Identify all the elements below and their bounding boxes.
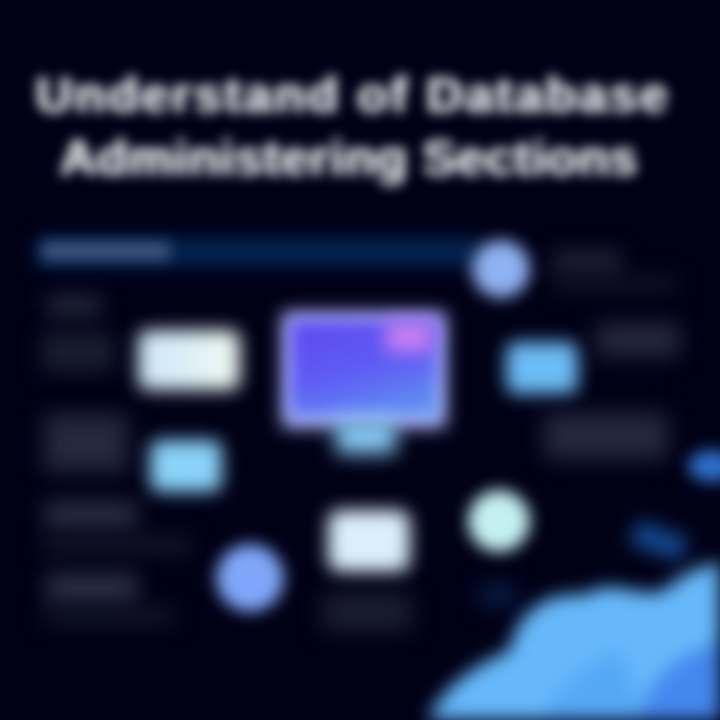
icon: lower right circle	[468, 490, 530, 552]
icon: right card	[506, 342, 578, 394]
label 2	[552, 277, 678, 291]
text block: left labels	[36, 288, 187, 626]
label 3	[44, 414, 128, 472]
monitor screen	[290, 320, 438, 416]
screen highlight	[386, 322, 432, 352]
label 4	[44, 502, 138, 528]
label 4	[544, 413, 668, 459]
bar label	[42, 242, 170, 260]
header bar	[28, 228, 486, 276]
title line 2: Administering Sections	[60, 130, 638, 186]
monitor stand	[336, 420, 396, 454]
bar track	[36, 237, 481, 267]
title line 1: Understand of Database	[36, 67, 671, 123]
icon: faint blue shape	[480, 584, 516, 606]
monitor frame	[282, 312, 446, 428]
label 6	[46, 574, 138, 602]
label 3	[596, 323, 680, 357]
label 1	[552, 251, 622, 273]
label 1	[46, 296, 102, 316]
icon: left large card	[138, 330, 240, 390]
icon: right edge dot	[688, 450, 720, 482]
icon: left lower card	[150, 440, 222, 492]
title	[28, 66, 676, 195]
icon: top right circle	[472, 240, 530, 298]
text block: right labels	[536, 244, 687, 468]
label 2	[42, 332, 114, 372]
label 5	[42, 536, 192, 554]
label 7	[44, 608, 174, 624]
central monitor	[266, 296, 462, 471]
icon: lower center card	[328, 510, 410, 572]
text block: lower center label	[322, 592, 412, 632]
icon: lower left circle	[216, 544, 284, 612]
icon: small blue shape	[629, 520, 689, 562]
